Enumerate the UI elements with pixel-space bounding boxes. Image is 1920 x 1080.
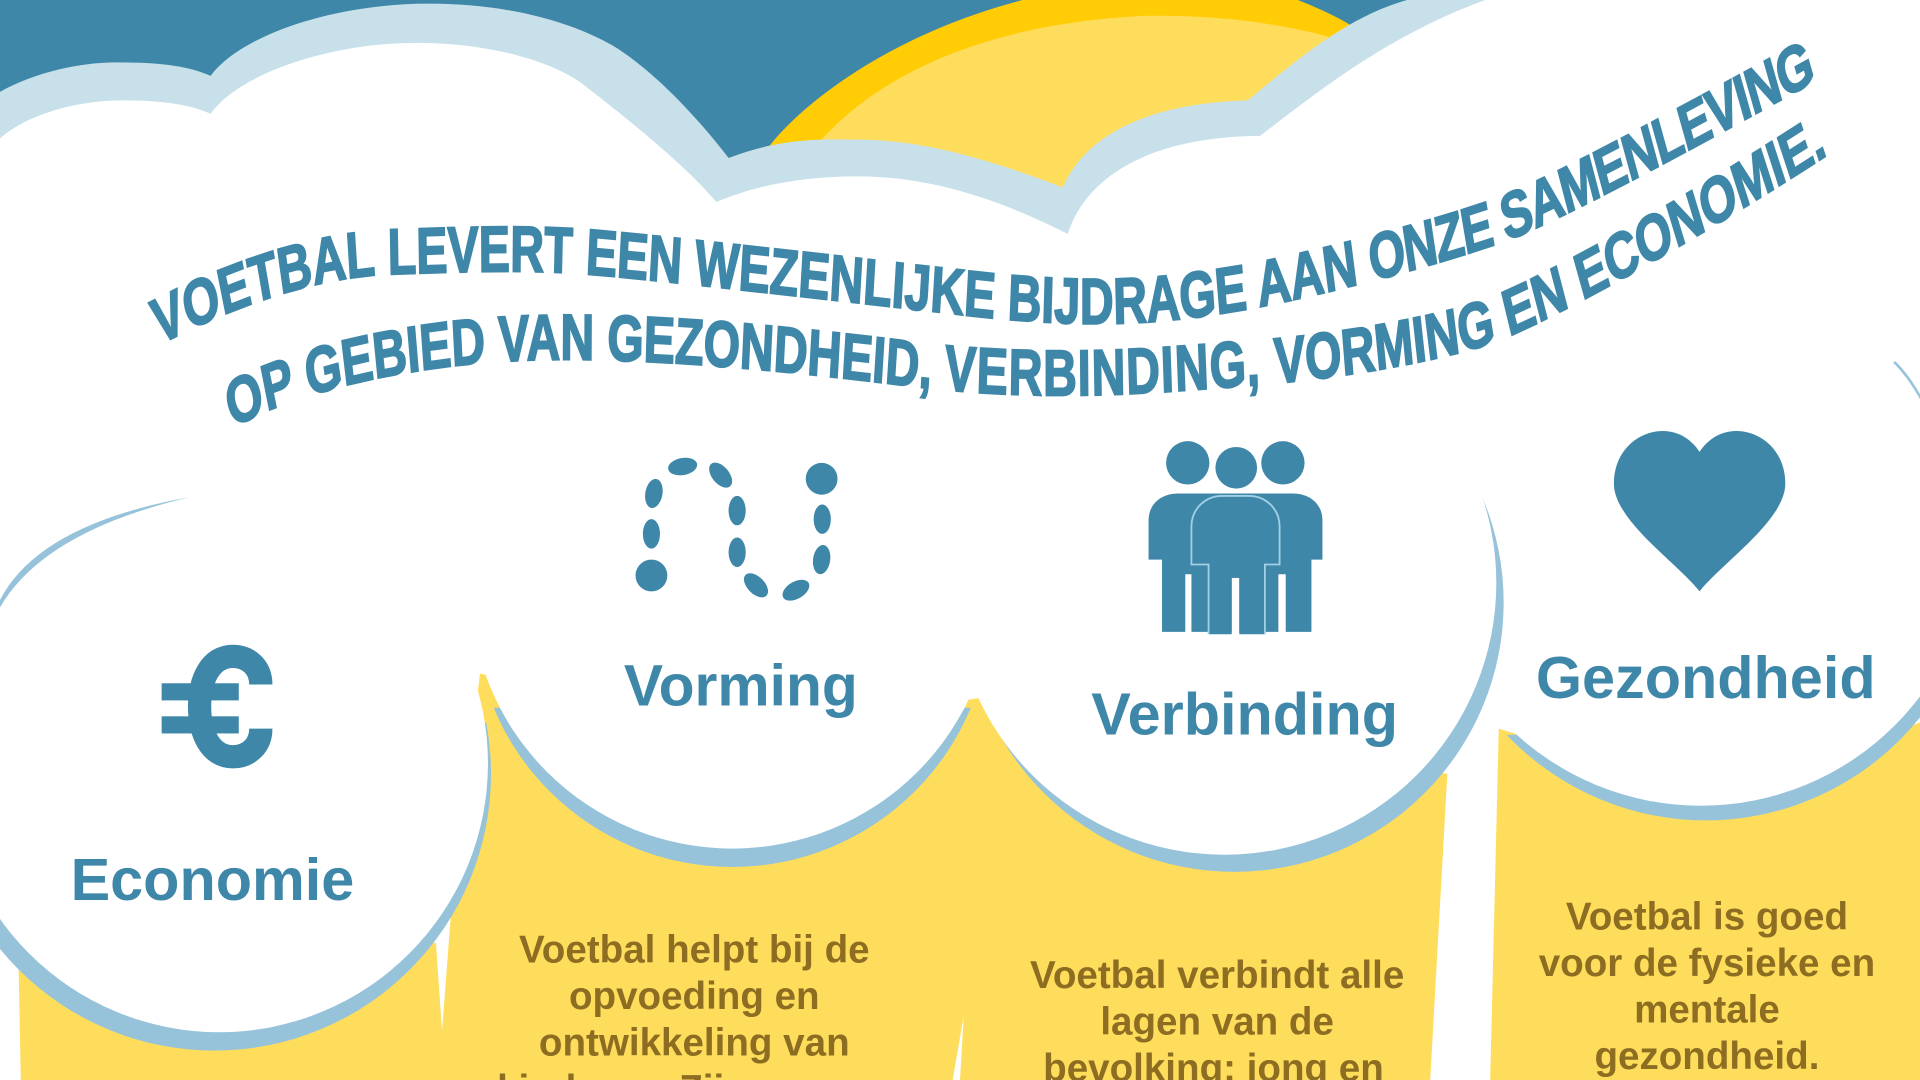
sun [768, 0, 1359, 367]
text: Gezondheid [1539, 895, 1875, 1078]
heading: Economie: Economie [71, 846, 354, 913]
headline: VOETBAL LEVERT EEN WEZENLIJKE BIJDRAGE AAN ONZE SAMENLEVING [147, 44, 1814, 340]
panel: Verbinding circle [978, 497, 1504, 872]
yellow panels [18, 673, 1920, 1080]
text: Verbinding: lagen van de [1100, 1001, 1334, 1044]
text: Gezondheid: gezondheid. [1594, 1035, 1819, 1078]
text: Gezondheid: mentale [1634, 988, 1780, 1031]
panel: Gezondheid circle [1506, 361, 1920, 820]
text: Gezondheid: Voetbal is goed [1566, 895, 1848, 938]
panel: Economie circle [0, 495, 491, 1051]
panel: Vorming circle [486, 674, 971, 867]
heading: Verbinding: Verbinding [1091, 681, 1398, 748]
icon: dotted path [636, 456, 838, 605]
text: Vorming: ontwikkeling van [539, 1022, 850, 1065]
text: Verbinding [1030, 954, 1404, 1080]
icon: euro [162, 656, 261, 757]
icon: heart [1614, 431, 1785, 591]
sky background [0, 0, 1920, 269]
heading: Gezondheid: Gezondheid [1536, 644, 1876, 711]
heading: Vorming: Vorming [624, 653, 858, 718]
text: Vorming: opvoeding en [569, 975, 820, 1018]
icon: group of people [1149, 441, 1322, 634]
text: Gezondheid: voor de fysieke en [1539, 942, 1875, 985]
text: Verbinding: Voetbal verbindt alle [1030, 954, 1404, 997]
text: Vorming [497, 928, 874, 1080]
headline: OP GEBIED VAN GEZONDHEID, VERBINDING, VORMING EN ECONOMIE. [226, 122, 1826, 423]
text: Vorming: Voetbal helpt bij de [519, 928, 870, 971]
